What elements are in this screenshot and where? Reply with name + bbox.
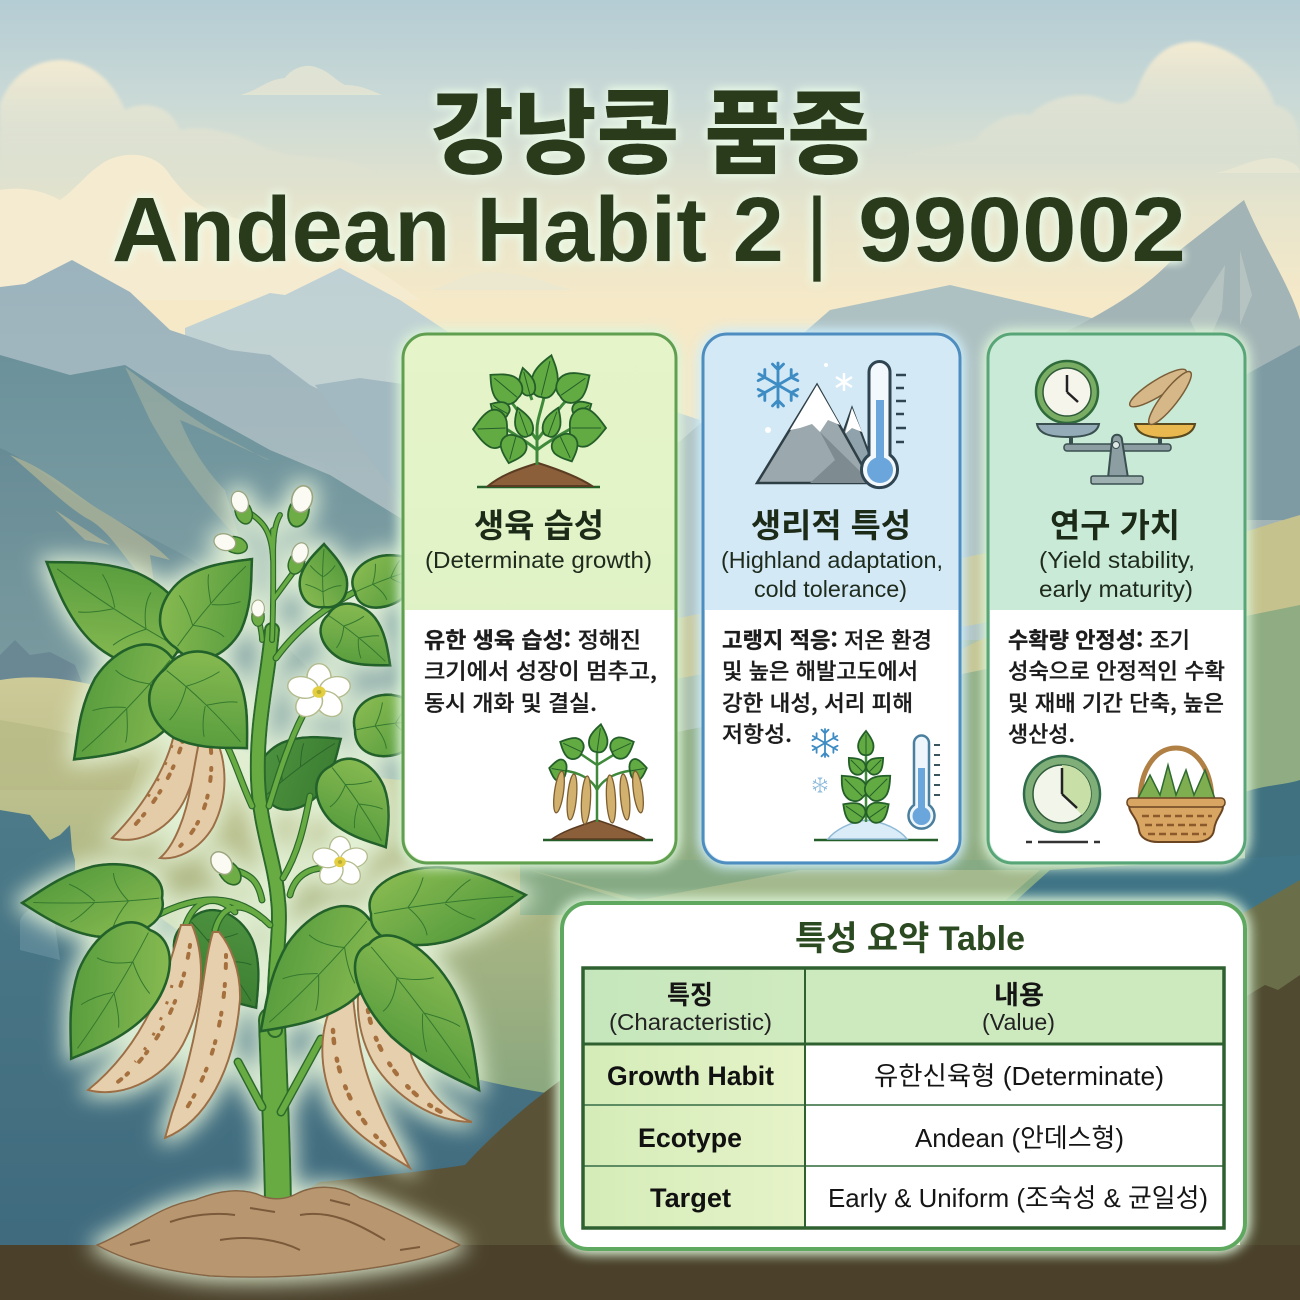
row: growth habit: Growth Habit bbox=[607, 1061, 774, 1091]
icon: mountain, snowflake, thermometer bbox=[757, 362, 906, 488]
subheading: (Determinate growth) bbox=[425, 547, 652, 573]
subheading bbox=[1039, 547, 1195, 602]
table heading: 특성 요약 Table bbox=[795, 920, 1025, 958]
panel: summary table bbox=[562, 903, 1245, 1249]
row: target: Early & Uniform (조숙성 & 균일성) bbox=[828, 1183, 1208, 1213]
subheading: early maturity) bbox=[1039, 576, 1193, 602]
description: 고랭지 적응: 저온 환경 bbox=[722, 623, 932, 655]
description: 유한 생육 습성: 정해진 bbox=[424, 623, 641, 655]
description: 크기에서 성장이 멈추고, bbox=[424, 654, 657, 686]
title line 2: separator: | bbox=[805, 180, 829, 282]
icon: bean plant in soil bbox=[472, 352, 606, 487]
panel: growth habit bbox=[403, 334, 676, 863]
row: growth habit: 유한신육형 (Determinate) bbox=[874, 1061, 1164, 1091]
description: 수확량 안정성: 조기 bbox=[1008, 623, 1190, 655]
heading: 생리적 특성 bbox=[751, 499, 911, 547]
description: 강한 내성, 서리 피해 bbox=[722, 686, 913, 718]
subheading: (Yield stability, bbox=[1039, 547, 1195, 573]
table header: characteristic bbox=[609, 980, 772, 1035]
panel: physiological traits bbox=[703, 334, 960, 863]
subheading: cold tolerance) bbox=[754, 576, 907, 602]
heading: 연구 가치 bbox=[1050, 499, 1180, 547]
icon: harvest basket bbox=[1127, 748, 1225, 842]
table header: characteristic: (Characteristic) bbox=[609, 1009, 772, 1035]
description bbox=[1008, 623, 1225, 749]
soil details bbox=[130, 1200, 420, 1250]
icon: clock bbox=[1024, 756, 1100, 842]
row: ecotype: Ecotype bbox=[638, 1123, 742, 1153]
row: target: Target bbox=[650, 1183, 731, 1213]
description: 및 재배 기간 단축, 높은 bbox=[1008, 686, 1224, 718]
title line 2: accession number: 990002 bbox=[858, 179, 1186, 281]
dark back leaves bbox=[160, 712, 360, 1030]
icon: plant with pods bbox=[543, 723, 653, 840]
subheading bbox=[721, 547, 943, 602]
row: ecotype: Andean (안데스형) bbox=[915, 1123, 1124, 1153]
description: 성숙으로 안정적인 수확 bbox=[1008, 654, 1225, 686]
row: ecotype bbox=[638, 1123, 1124, 1153]
icon: seedling in snow with thermometer bbox=[812, 729, 940, 840]
row: growth habit bbox=[607, 1061, 1164, 1091]
row: target bbox=[650, 1183, 1208, 1213]
title line 2: variety name: Andean Habit 2 bbox=[112, 179, 784, 281]
flowers and buds bbox=[206, 483, 370, 889]
table header: value bbox=[982, 980, 1055, 1035]
table grid bbox=[583, 968, 1224, 1228]
description: 저항성. bbox=[722, 717, 792, 749]
pods: upper pair bbox=[112, 722, 224, 858]
soil mound bbox=[97, 1187, 460, 1277]
description: 동시 개화 및 결실. bbox=[424, 686, 597, 718]
description: 및 높은 해발고도에서 bbox=[722, 654, 918, 686]
table card bbox=[562, 903, 1245, 1249]
card body bbox=[988, 334, 1245, 863]
card body bbox=[703, 334, 960, 863]
stems and branches bbox=[130, 510, 400, 1205]
description bbox=[424, 623, 657, 718]
description: 생산성. bbox=[1008, 717, 1075, 749]
title line 1: Korean: 강낭콩 품종 bbox=[431, 60, 870, 193]
pods: lower pairs bbox=[88, 925, 472, 1168]
title bbox=[112, 60, 1186, 282]
table header: characteristic: 특징 bbox=[667, 980, 713, 1010]
table header: value: (Value) bbox=[982, 1009, 1055, 1035]
heading: 생육 습성 bbox=[474, 499, 604, 547]
leaves bbox=[21, 527, 530, 1114]
description bbox=[722, 623, 932, 749]
subheading: (Highland adaptation, bbox=[721, 547, 943, 573]
card body bbox=[403, 334, 676, 863]
bean plant illustration bbox=[21, 483, 530, 1277]
icon: balance with clock and pods bbox=[1036, 361, 1197, 484]
table header: value: 내용 bbox=[994, 980, 1044, 1010]
panel: research value bbox=[988, 334, 1245, 863]
